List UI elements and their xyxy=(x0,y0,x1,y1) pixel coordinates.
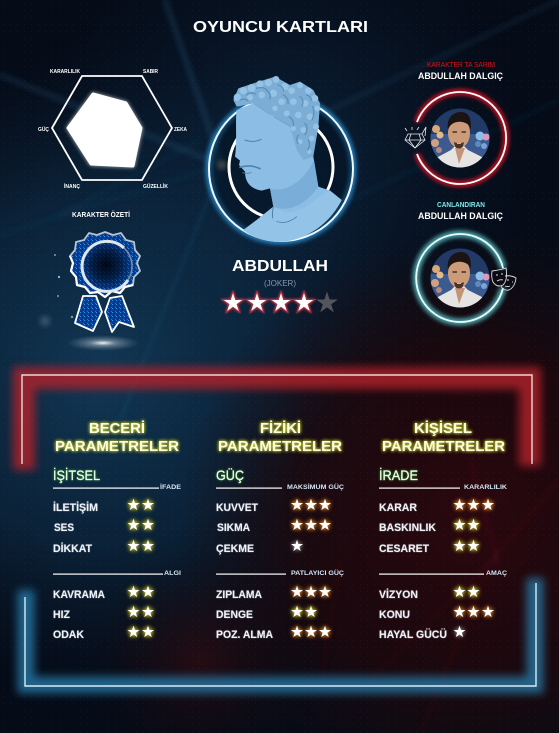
group: decisiveness: CESARET xyxy=(379,543,429,555)
credit: actor: CANLANDIRAN xyxy=(437,202,485,209)
group: maximum power: MAKSİMUM GÜÇ xyxy=(287,482,344,491)
rating stars xyxy=(222,292,338,312)
group: decisiveness: BASKINLIK xyxy=(379,522,436,534)
radar chart: SABIR xyxy=(143,69,158,75)
group: perception xyxy=(53,570,181,641)
group: decisiveness: KARARLILIK xyxy=(464,484,507,491)
radar chart: İNANÇ xyxy=(64,183,80,190)
credit: character design: KARAKTER TA SARIM xyxy=(427,62,495,69)
group: expression: İFADE xyxy=(160,483,182,491)
group: expression xyxy=(53,483,182,555)
neon frame: red top xyxy=(22,375,532,470)
credit: character design xyxy=(405,62,506,184)
heading: physical parameters xyxy=(218,420,342,455)
group: perception: ODAK xyxy=(53,629,84,641)
group: perception: KAVRAMA xyxy=(53,589,105,601)
group: explosive power: PATLAYICI GÜÇ xyxy=(291,568,344,577)
radar chart: GÜÇ xyxy=(38,126,49,133)
group: maximum power: KUVVET xyxy=(216,502,258,514)
character role: (JOKER) xyxy=(264,278,296,288)
credit: actor xyxy=(416,202,516,322)
heading: physical parameters: FİZİKİ xyxy=(260,420,301,437)
heading: personal parameters: PARAMETRELER xyxy=(382,438,505,455)
central portrait xyxy=(209,76,353,242)
character summary label: KARAKTER ÖZETİ xyxy=(72,210,130,219)
group: purpose: KONU xyxy=(379,609,410,621)
panel: skill parameters xyxy=(53,420,182,641)
panel: physical parameters xyxy=(216,420,344,641)
group: purpose: HAYAL GÜCÜ xyxy=(379,628,447,641)
group: explosive power: POZ. ALMA xyxy=(216,629,273,641)
subheading: power: GÜÇ xyxy=(216,466,244,483)
heading: skill parameters xyxy=(55,420,179,455)
credit: character design: ABDULLAH DALGIÇ xyxy=(418,71,503,81)
credit: actor: ABDULLAH DALGIÇ xyxy=(418,211,503,221)
panel: personal parameters xyxy=(379,420,507,641)
icon: diamond and pen xyxy=(405,127,426,148)
heading: personal parameters: KİŞİSEL xyxy=(414,420,472,437)
icon: theatre masks xyxy=(492,268,516,290)
group: explosive power: ZIPLAMA xyxy=(216,589,262,601)
heading: personal parameters xyxy=(382,420,505,455)
group: explosive power: DENGE xyxy=(216,609,253,621)
bust sculpture xyxy=(233,76,342,242)
radar chart: GÜZELLİK xyxy=(143,183,168,190)
character name: ABDULLAH xyxy=(232,258,328,275)
group: expression: DİKKAT xyxy=(53,542,92,555)
group: explosive power xyxy=(216,568,344,641)
subheading: hearing: İŞİTSEL xyxy=(53,466,100,483)
heading: skill parameters: BECERİ xyxy=(89,420,145,437)
heading: physical parameters: PARAMETRELER xyxy=(218,438,342,455)
radar chart: ZEKA xyxy=(174,127,187,133)
group: purpose xyxy=(379,570,507,641)
radar chart: KARARLILIK xyxy=(50,69,80,75)
group: maximum power: SIKMA xyxy=(217,522,250,534)
group: perception: ALGI xyxy=(164,570,181,577)
group: expression: İLETİŞİM xyxy=(53,501,98,514)
group: maximum power xyxy=(216,482,344,555)
title: OYUNCU KARTLARI xyxy=(193,19,368,36)
subheading: will: İRADE xyxy=(379,466,418,483)
group: decisiveness xyxy=(379,484,507,555)
heading: skill parameters: PARAMETRELER xyxy=(55,438,179,455)
group: expression: SES xyxy=(54,522,74,534)
group: decisiveness: KARAR xyxy=(379,502,417,514)
icon: medal rosette xyxy=(40,232,140,351)
group: maximum power: ÇEKME xyxy=(216,543,254,555)
group: perception: HIZ xyxy=(53,609,70,621)
group: purpose: VİZYON xyxy=(379,588,418,601)
radar chart xyxy=(38,69,187,190)
group: purpose: AMAÇ xyxy=(486,570,507,577)
neon frame: blue bottom xyxy=(25,578,536,686)
